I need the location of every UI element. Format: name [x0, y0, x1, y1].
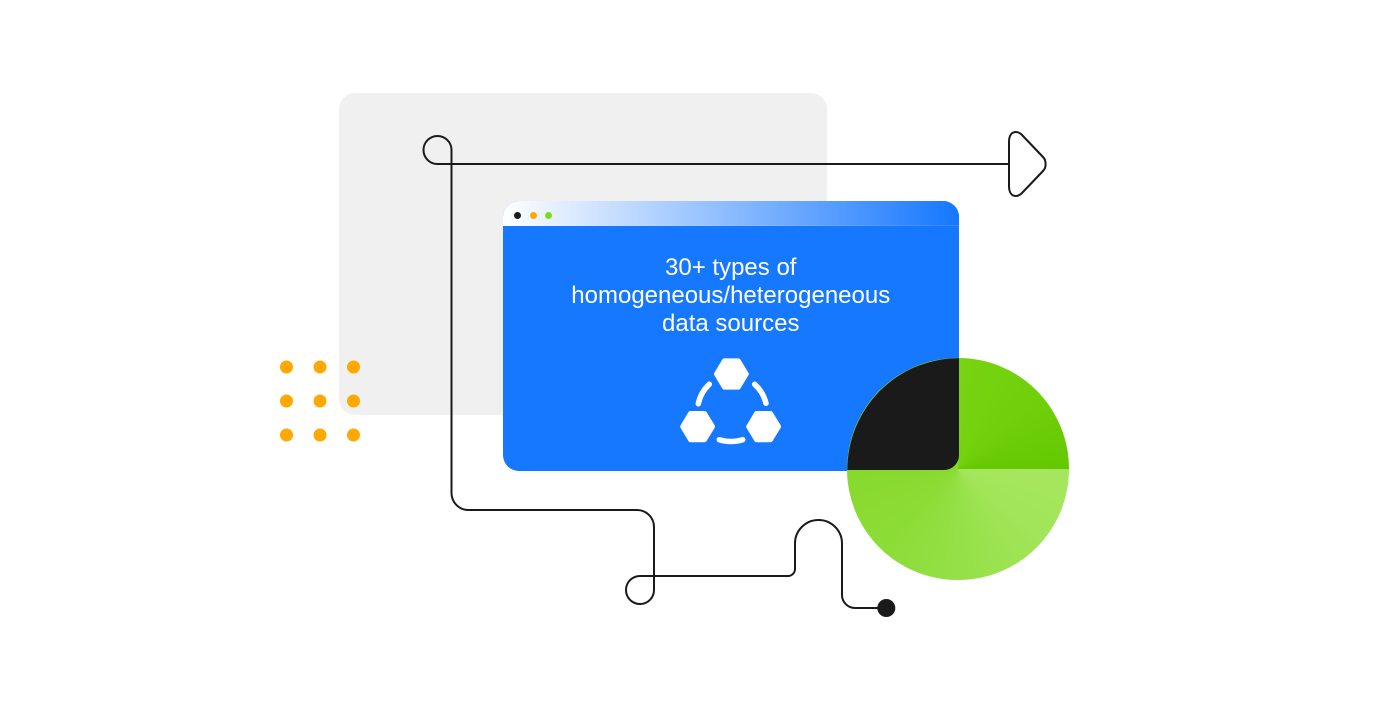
black overlap quadrant — [847, 358, 959, 470]
heading text — [571, 254, 890, 337]
arrow head — [1008, 131, 1047, 197]
window dot: orange — [530, 212, 536, 219]
window title bar — [502, 201, 959, 226]
heading text: 30+ types of — [665, 254, 796, 281]
heading text: data sources — [662, 310, 799, 337]
window dot: green — [545, 212, 552, 219]
connector line with loops and end dot — [422, 135, 1008, 617]
panel: gray background card — [339, 93, 827, 415]
green pie circle — [847, 358, 1069, 580]
panel: blue browser window — [502, 201, 959, 470]
window dot: black — [514, 212, 520, 219]
icon: three connected hexagons — [680, 358, 782, 444]
heading text: homogeneous/heterogeneous — [571, 282, 890, 309]
orange dot grid — [280, 360, 360, 442]
